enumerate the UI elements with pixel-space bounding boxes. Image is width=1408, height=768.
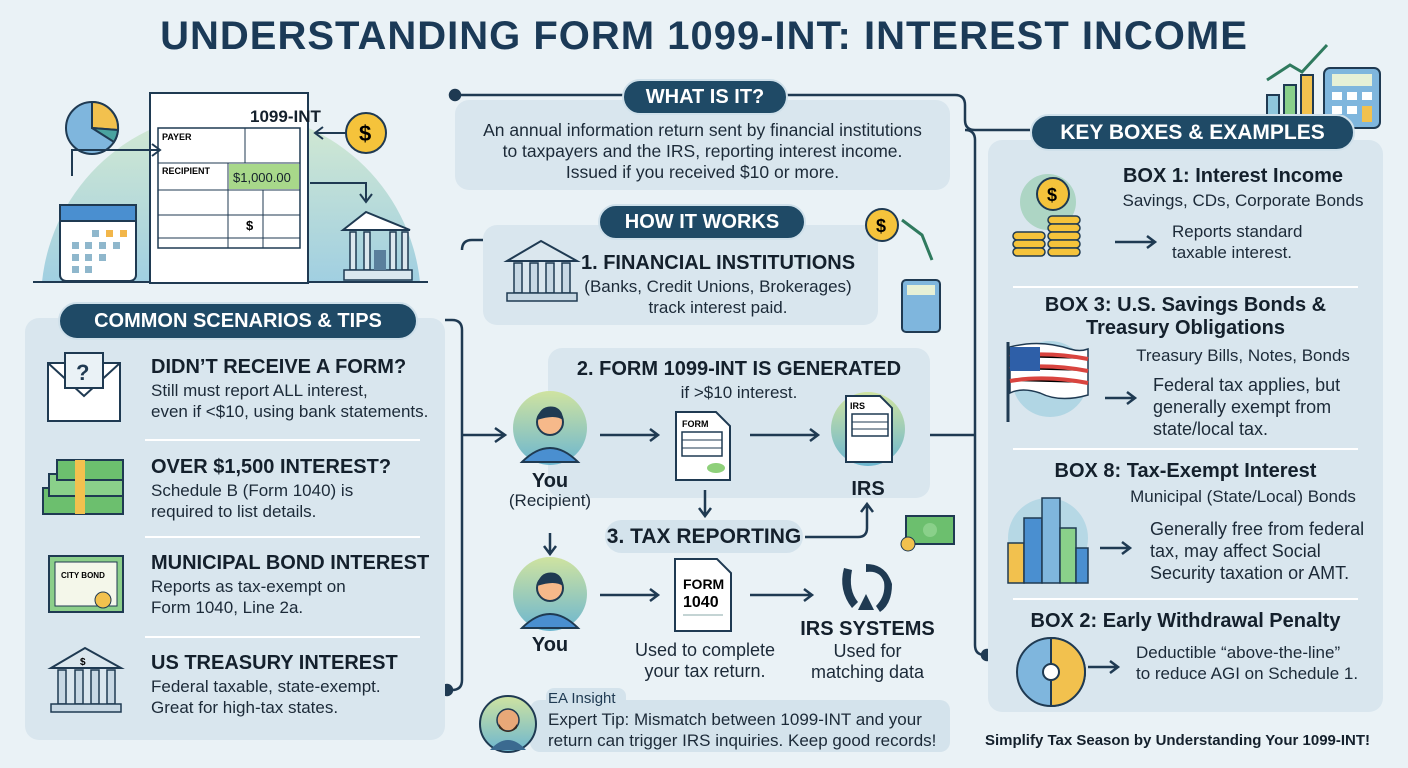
- scenario: over 1500: Schedule B (Form 1040) is: [151, 481, 353, 500]
- text: IRS systems: Used for: [833, 641, 902, 661]
- scenario: municipal: [48, 552, 429, 617]
- text: used to complete: Used to complete: [635, 640, 775, 660]
- box 1: [1012, 165, 1363, 262]
- title: UNDERSTANDING FORM 1099-INT: INTEREST INCOME: [160, 14, 1248, 58]
- icon: you recipient: [509, 391, 591, 510]
- icon: coin and calculator: [865, 208, 941, 333]
- panel: step 1: [483, 225, 878, 325]
- icon: you: You: [532, 634, 568, 656]
- icon: you recipient: (Recipient): [509, 491, 591, 510]
- pill: how it works: [598, 204, 806, 240]
- arrow: [750, 428, 820, 442]
- icon: bank: $: [80, 657, 86, 668]
- box 1: taxable interest.: [1172, 243, 1292, 262]
- illustration: 1099-INT form: [33, 92, 428, 284]
- icon: form: [675, 411, 731, 481]
- icon: IRS: IRS: [851, 478, 885, 500]
- scenario: no form: Still must report ALL interest,: [151, 381, 368, 400]
- icon: form 1040: FORM: [683, 576, 724, 592]
- panel: step 1: track interest paid.: [649, 298, 787, 317]
- icon: IRS: [831, 392, 905, 500]
- icon: envelope: [47, 352, 121, 422]
- scenario: over 1500: OVER $1,500 INTEREST?: [151, 456, 391, 478]
- scenario: treasury: Federal taxable, state-exempt.: [151, 677, 381, 696]
- scenario: municipal: Form 1040, Line 2a.: [151, 598, 303, 617]
- illustration: 1099-INT form: RECIPIENT: [162, 166, 211, 176]
- icon: expert: [479, 695, 537, 753]
- box 2: to reduce AGI on Schedule 1.: [1136, 664, 1358, 683]
- scenario: municipal: MUNICIPAL BOND INTEREST: [151, 552, 429, 574]
- box 2: Deductible “above-the-line”: [1136, 643, 1340, 662]
- EA insight: Expert Tip: Mismatch between 1099-INT and your: [548, 710, 922, 729]
- icon: city bond: CITY BOND: [61, 571, 105, 580]
- icon: form 1040: 1040: [683, 594, 719, 611]
- panel: what is it: to taxpayers and the IRS, reporting interest income.: [503, 141, 902, 161]
- EA insight: EA Insight: [548, 690, 616, 707]
- illustration: 1099-INT form: PAYER: [162, 132, 192, 142]
- box 8: Security taxation or AMT.: [1150, 563, 1349, 583]
- icon: money: [900, 515, 955, 552]
- pill: how it works: HOW IT WORKS: [625, 211, 779, 233]
- EA insight: [479, 688, 950, 753]
- pill: common scenarios: [58, 302, 418, 340]
- panel: what is it: An annual information return sent by financial institutions: [483, 120, 922, 140]
- text: used to complete: your tax return.: [644, 661, 766, 681]
- scenario: treasury: US TREASURY INTEREST: [151, 652, 398, 674]
- icon: coins: [1012, 174, 1081, 257]
- box 3: Federal tax applies, but: [1153, 375, 1340, 395]
- footer: Simplify Tax Season by Understanding Your 1099-INT!: [985, 732, 1370, 749]
- box 3: [1006, 294, 1350, 439]
- scenario: no form: DIDN’T RECEIVE A FORM?: [151, 356, 406, 378]
- scenario: no form: even if <$10, using bank statements.: [151, 402, 428, 421]
- pill: key boxes: KEY BOXES & EXAMPLES: [1060, 121, 1325, 144]
- illustration: 1099-INT form: $: [246, 218, 254, 233]
- box 3: Treasury Obligations: [1086, 317, 1285, 339]
- box 1: Savings, CDs, Corporate Bonds: [1123, 191, 1363, 210]
- panel: step 2: 2. FORM 1099-INT IS GENERATED: [577, 358, 901, 380]
- box 8: tax, may affect Social: [1150, 541, 1321, 561]
- icon: IRS systems: [842, 564, 892, 612]
- icon: city: [1007, 497, 1089, 584]
- panel: step 2: if >$10 interest.: [681, 383, 797, 402]
- icon: you: [513, 557, 587, 656]
- icon: city bond: [48, 555, 124, 613]
- scenario: municipal: Reports as tax-exempt on: [151, 577, 346, 596]
- scenario: treasury: [48, 646, 398, 717]
- icon: IRS: IRS: [850, 401, 865, 411]
- scenario: treasury: Great for high-tax states.: [151, 698, 338, 717]
- pill: tax reporting: 3. TAX REPORTING: [607, 525, 801, 548]
- icon: disc: [1016, 637, 1086, 707]
- text: IRS systems: [800, 618, 935, 682]
- icon: coins: $: [1047, 185, 1057, 205]
- icon: coin and calculator: $: [876, 216, 886, 236]
- icon: cash: [42, 459, 124, 515]
- pill: what is it: WHAT IS IT?: [646, 86, 764, 108]
- scenario: over 1500: [42, 456, 391, 521]
- pill: what is it: [622, 79, 788, 115]
- text: used to complete: [635, 640, 775, 681]
- box 3: Treasury Bills, Notes, Bonds: [1136, 346, 1350, 365]
- panel: key boxes: [988, 140, 1383, 712]
- panel: step 2: [548, 348, 930, 498]
- illustration: 1099-INT form: $1,000.00: [233, 170, 291, 185]
- panel: step 1: 1. FINANCIAL INSTITUTIONS: [581, 252, 855, 274]
- icon: form 1040: [674, 558, 732, 632]
- EA insight: return can trigger IRS inquiries. Keep good records!: [548, 731, 936, 750]
- panel: what is it: [455, 100, 950, 190]
- pill: key boxes: [1030, 114, 1355, 151]
- illustration: 1099-INT form: 1099-INT: [250, 107, 321, 126]
- box 3: generally exempt from: [1153, 397, 1331, 417]
- panel: step 1: (Banks, Credit Unions, Brokerages): [584, 277, 852, 296]
- illustration: 1099-INT form: $: [359, 121, 371, 146]
- panel: what is it: Issued if you received $10 or more.: [566, 162, 839, 182]
- box 1: BOX 1: Interest Income: [1123, 165, 1343, 187]
- icon: chart + calculator: [1266, 44, 1381, 129]
- box 8: Municipal (State/Local) Bonds: [1130, 487, 1356, 506]
- icon: flag: [1006, 341, 1089, 422]
- scenario: no form: [47, 352, 428, 422]
- box 2: BOX 2: Early Withdrawal Penalty: [1031, 610, 1340, 632]
- icon: bank: [504, 240, 581, 302]
- text: IRS systems: matching data: [811, 662, 924, 682]
- icon: envelope: ?: [76, 360, 89, 385]
- box 8: BOX 8: Tax-Exempt Interest: [1055, 460, 1316, 482]
- box 3: BOX 3: U.S. Savings Bonds &: [1045, 294, 1326, 316]
- arrow: [600, 428, 660, 442]
- box 1: Reports standard: [1172, 222, 1302, 241]
- icon: form: FORM: [682, 419, 708, 429]
- box 2: [1016, 610, 1358, 707]
- box 3: state/local tax.: [1153, 419, 1268, 439]
- icon: you recipient: You: [532, 470, 568, 492]
- icon: bank: [48, 646, 125, 713]
- box 8: Generally free from federal: [1150, 519, 1364, 539]
- box 8: [1007, 460, 1364, 584]
- pill: common scenarios: COMMON SCENARIOS & TIPS: [94, 310, 382, 332]
- scenario: over 1500: required to list details.: [151, 502, 316, 521]
- arrows down: [543, 490, 874, 602]
- text: IRS systems: IRS SYSTEMS: [800, 618, 935, 640]
- pill: tax reporting: [605, 520, 803, 553]
- panel: common scenarios: [25, 318, 445, 740]
